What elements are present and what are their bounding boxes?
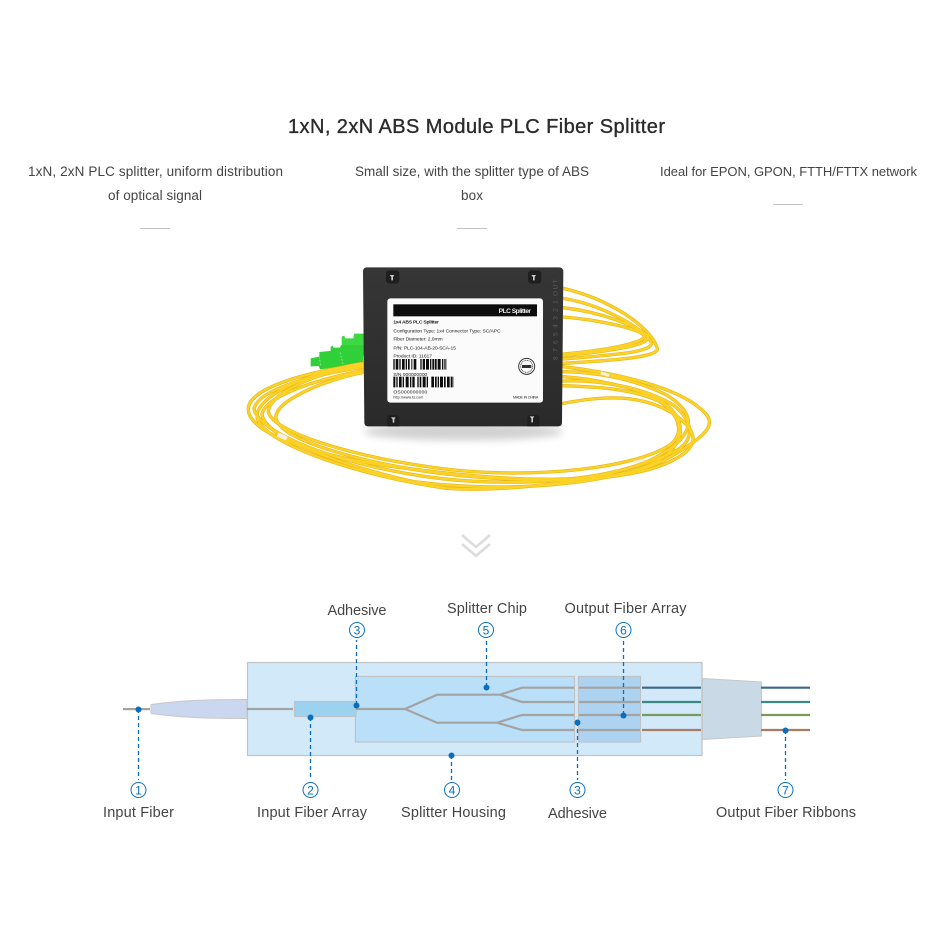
- feature: small size: Small size, with the splitter type of ABS: [355, 164, 589, 179]
- feature: small size: [355, 164, 589, 229]
- yellow fiber coils: [248, 288, 709, 489]
- label spec lines: Product ID: 11617: [393, 354, 432, 360]
- splitter structure diagram: [103, 601, 856, 822]
- waveguide paths: [247, 688, 640, 730]
- badge numerals: 2: [307, 784, 314, 798]
- dashed leader lines: [138, 640, 786, 780]
- housing screws: [386, 270, 541, 426]
- badge numerals: 7: [782, 784, 789, 798]
- feature: uniform distribution: [28, 164, 283, 229]
- feature: small size: box: [461, 188, 483, 203]
- barcode 1: [393, 348, 447, 380]
- diagram labels: Input Fiber Array: [257, 805, 368, 821]
- box shadow: [363, 423, 563, 440]
- product label: [387, 298, 543, 403]
- label spec lines: 1x4 ABS PLC Splitter: [393, 320, 439, 326]
- label spec lines: Fiber Diameter: 2.0mm: [393, 337, 443, 343]
- label spec lines: S/N 000000000: [393, 372, 428, 378]
- diagram labels: Splitter Housing: [401, 805, 506, 821]
- colored output fibers inside housing: [642, 688, 701, 730]
- output fiber array: [578, 676, 640, 742]
- badge numerals: [135, 624, 789, 798]
- yellow fiber highlight: [248, 288, 709, 489]
- badge numerals: 3: [354, 624, 361, 638]
- title: 1xN, 2xN ABS Module PLC Fiber Splitter: [288, 116, 665, 138]
- label spec lines: P/N: PLC-104-AB-20-SCA-15: [393, 345, 456, 351]
- splitter chip: [356, 676, 574, 742]
- badge numerals: 5: [483, 624, 490, 638]
- badge numerals: 4: [449, 784, 456, 798]
- label header bar: [393, 304, 537, 316]
- label spec lines: http://www.fs.com: [393, 396, 423, 400]
- badge numerals: 6: [620, 624, 627, 638]
- port numbers: 8 7 6 5 4 3 2 1 OUT: [553, 279, 560, 360]
- label spec lines: Configuration Type: 1x4 Connector Type: SC/APC: [393, 328, 501, 334]
- diagram labels: Adhesive: [328, 603, 386, 619]
- green SC connectors: [311, 334, 364, 369]
- diagram labels: [103, 601, 856, 822]
- leader dots: [136, 684, 788, 758]
- label spec lines: [393, 320, 539, 400]
- diagram labels: Adhesive: [548, 806, 607, 822]
- badge numerals: 3: [574, 784, 581, 798]
- down chevrons: [462, 535, 490, 556]
- feature: uniform distribution: of optical signal: [108, 188, 202, 203]
- diagram labels: Output Fiber Array: [564, 601, 687, 617]
- barcode 2: [393, 366, 454, 398]
- diagram labels: Output Fiber Ribbons: [716, 805, 856, 821]
- badge numerals: 1: [135, 784, 142, 798]
- feature: uniform distribution: 1xN, 2xN PLC splitter, uniform distribution: [28, 164, 283, 179]
- number badges: [131, 622, 793, 798]
- label spec lines: MADE IN CHINA: [513, 396, 539, 400]
- diagram labels: Input Fiber: [103, 805, 174, 821]
- diagram labels: Splitter Chip: [447, 601, 527, 617]
- splitter housing: [248, 662, 702, 756]
- module housing: [363, 267, 563, 426]
- input fiber: [123, 708, 150, 710]
- output fiber ribbon boot: [702, 678, 762, 740]
- input taper boot: [151, 700, 247, 718]
- input fiber array: [294, 702, 356, 716]
- label header text: PLC Splitter: [499, 308, 531, 315]
- feature: ideal network: Ideal for EPON, GPON, FTTH/FTTX network: [660, 164, 918, 179]
- product photo: ABS splitter module: [248, 267, 709, 489]
- white fiber markers: [277, 371, 644, 464]
- certification seal: [519, 358, 535, 374]
- label spec lines: OS000000000: [393, 389, 428, 395]
- output fiber ribbons: [761, 688, 810, 730]
